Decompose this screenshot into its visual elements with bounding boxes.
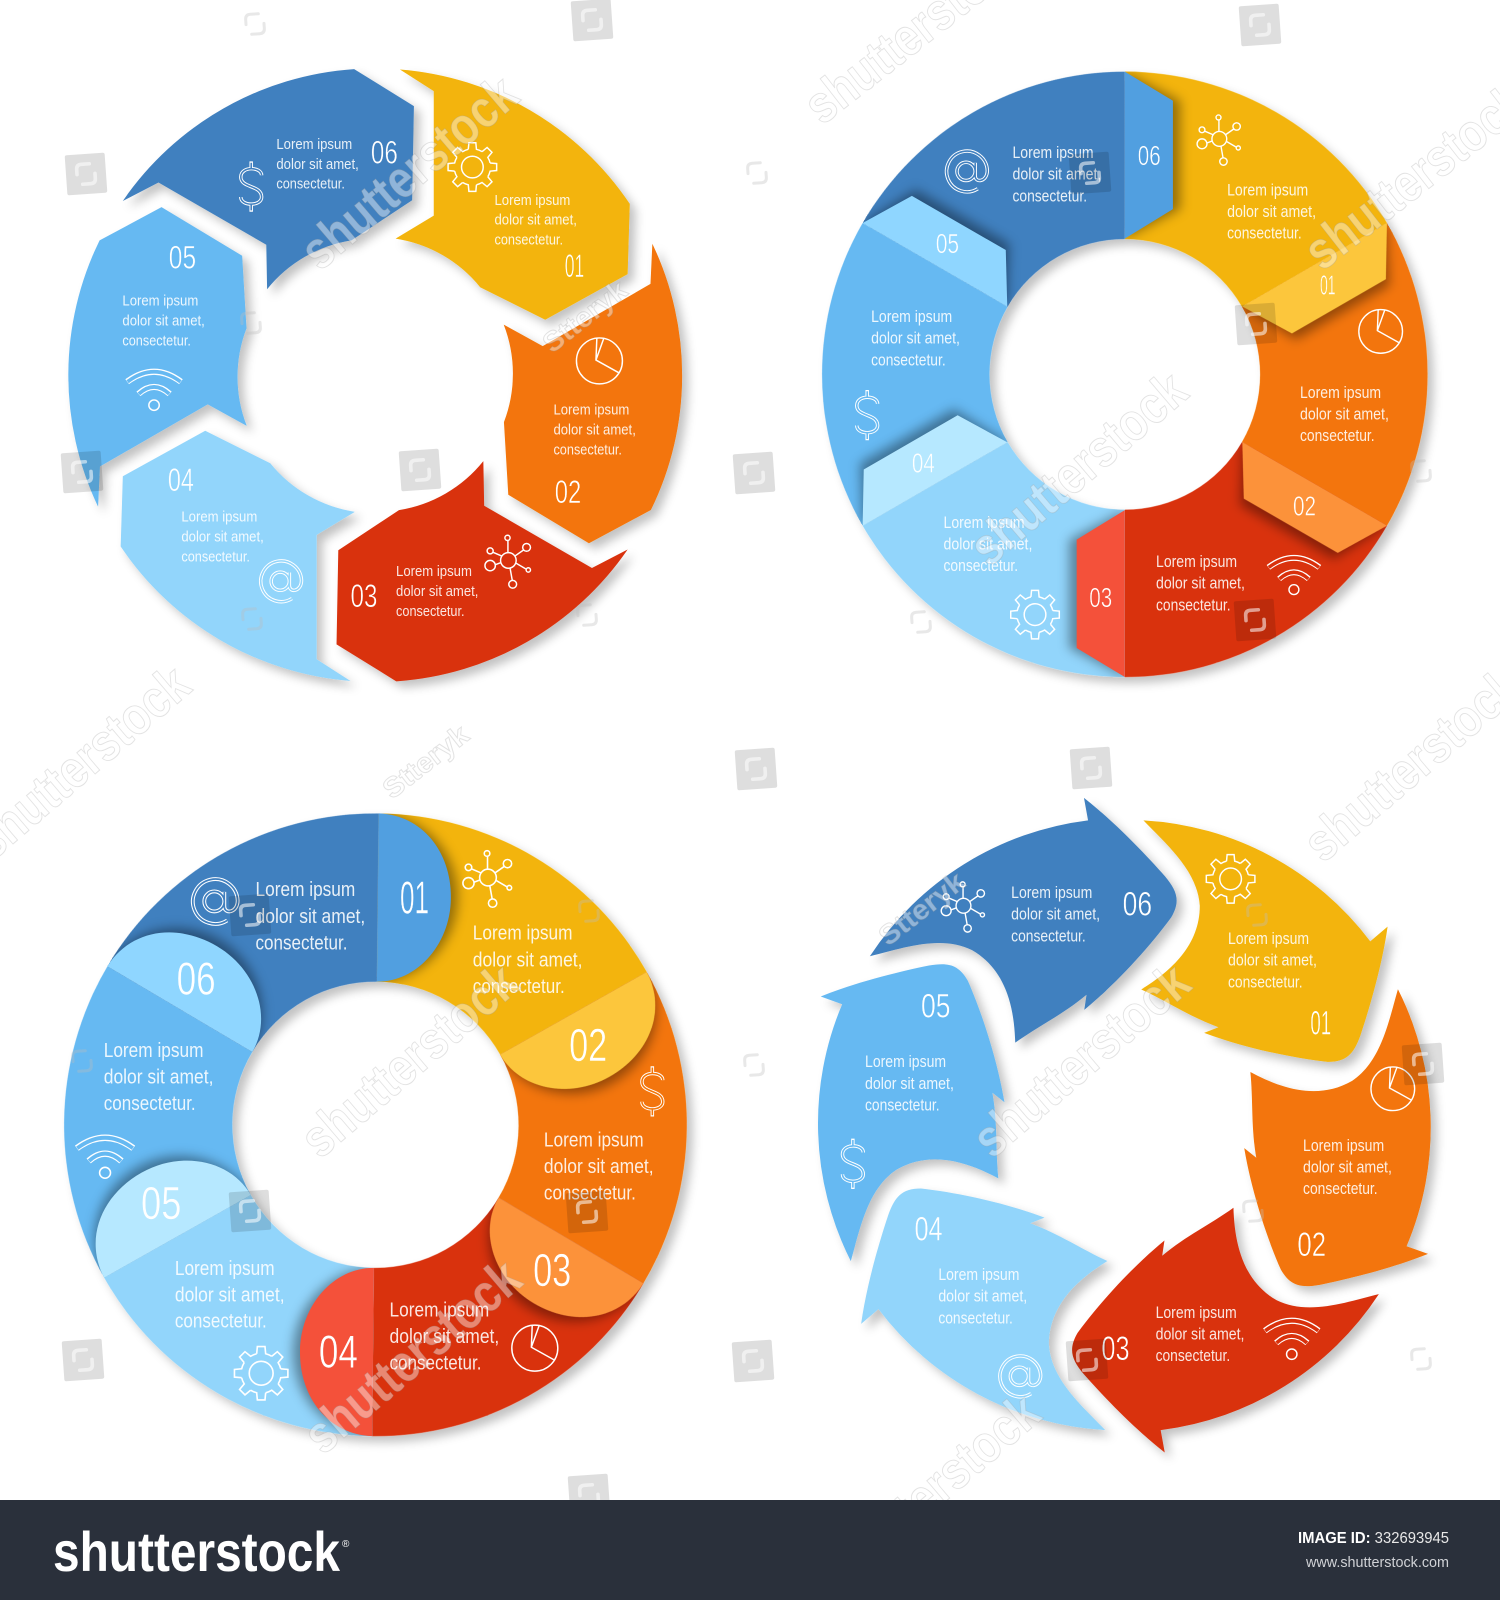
- segment 01 yellow: consectetur.: [494, 232, 563, 249]
- arrow 02 orange: consectetur.: [1303, 1180, 1378, 1198]
- tab 06: [1125, 72, 1180, 239]
- arrow 02 orange: dolor sit amet,: [1303, 1158, 1392, 1176]
- tab 03: 03: [533, 1244, 571, 1296]
- tab 01: 01: [400, 872, 429, 924]
- footer band: [0, 1500, 1500, 1600]
- stock watermarks: shutterstock: [961, 952, 1202, 1169]
- segment 03 red: [296, 421, 630, 749]
- ring 2 text and icon: yellow: dolor sit amet,: [1227, 203, 1316, 221]
- ring 3 text and icon: mid blue: Lorem ipsum: [104, 1040, 203, 1062]
- ring 3 text and icon: orange: consectetur.: [544, 1182, 636, 1204]
- segment 05 mid blue: [0, 183, 317, 510]
- tab 06: 06: [177, 953, 216, 1005]
- tab 01: [1242, 223, 1396, 345]
- ring 2 text and icon: dark blue: consectetur.: [1012, 187, 1087, 205]
- arrow 04 light blue: dolor sit amet,: [938, 1288, 1027, 1306]
- ring 2 text and icon: yellow: consectetur.: [1227, 225, 1302, 243]
- stock watermarks: shutterstock: [811, 1382, 1052, 1599]
- segment 02 orange: [433, 240, 767, 568]
- ring 3 text and icon: light blue: [175, 1258, 288, 1400]
- ring 2 text and icon: red: consectetur.: [1156, 596, 1231, 614]
- ring 2 text and icon: mid blue: dolor sit amet,: [871, 330, 960, 348]
- arrow 05 mid blue: Lorem ipsum: [865, 1053, 946, 1071]
- ring 2 text and icon: orange: consectetur.: [1300, 427, 1375, 445]
- arrow 05 mid blue: dolor sit amet,: [865, 1075, 954, 1093]
- ring 3 text and icon: red: consectetur.: [390, 1352, 481, 1374]
- ring 3 text and icon: orange: dolor sit amet,: [544, 1156, 654, 1178]
- image id: IMAGE ID: 332693945: [1298, 1530, 1449, 1547]
- ring 3 text and icon: yellow: Lorem ipsum: [473, 923, 573, 945]
- tab 05: 05: [936, 228, 959, 259]
- tab 05: [65, 1125, 251, 1278]
- ring 2: full ring with hexagonal folded tabs: [732, 0, 1500, 753]
- arrow 06 dark blue: dolor sit amet,: [1011, 906, 1100, 924]
- segment 02 orange: consectetur.: [553, 442, 622, 459]
- segment 03 red: 03: [351, 578, 377, 614]
- ring 3 text and icon: orange: [544, 1066, 663, 1204]
- segment 03 red: dolor sit amet,: [396, 583, 478, 600]
- tab 01: [377, 813, 459, 983]
- ring 2 text and icon: yellow: [1197, 115, 1316, 243]
- footer logo: shutterstock: [53, 1520, 341, 1583]
- arrow 03 red: dolor sit amet,: [1156, 1325, 1244, 1343]
- ring 3 text and icon: dark blue: [193, 879, 365, 955]
- tab 06: [107, 897, 293, 1052]
- ring 2 text and icon: red: dolor sit amet,: [1156, 575, 1245, 593]
- segment 05 mid blue: 05: [169, 240, 196, 276]
- segment 04 light blue: Lorem ipsum: [181, 508, 257, 525]
- arrow 04 light blue: [861, 1189, 1107, 1430]
- ring 2 text and icon: light blue: [944, 514, 1059, 639]
- stock watermarks: shutterstock: [289, 64, 530, 281]
- tab 06: 06: [1138, 140, 1161, 171]
- segment 06 dark blue: 06: [371, 135, 398, 171]
- ring 2 text and icon: light blue: dolor sit amet,: [944, 536, 1032, 554]
- arrow 02 orange: [1188, 987, 1500, 1322]
- ring 2 text and icon: dark blue: [947, 144, 1101, 205]
- stock watermarks: Stteryk: [873, 865, 971, 952]
- segment 05 mid blue: consectetur.: [122, 332, 191, 349]
- ring 2 text and icon: yellow: Lorem ipsum: [1227, 181, 1308, 199]
- tab 04: 04: [912, 447, 935, 478]
- ring 2 text and icon: dark blue: dolor sit amet,: [1012, 166, 1101, 184]
- segment 03 red: consectetur.: [396, 603, 465, 620]
- arrow 01 yellow: 01: [1310, 1005, 1331, 1043]
- tab 02: [500, 972, 664, 1101]
- ring 3 text and icon: orange: Lorem ipsum: [544, 1129, 644, 1151]
- ring 3 text and icon: yellow: [463, 851, 583, 998]
- ring 3 text and icon: yellow: dolor sit amet,: [473, 949, 583, 971]
- tab 05: 05: [141, 1177, 181, 1229]
- ring 3 text and icon: red: Lorem ipsum: [390, 1299, 489, 1321]
- tab 02: 02: [569, 1019, 607, 1071]
- stock watermarks: Stteryk: [377, 718, 475, 805]
- arrow 05 mid blue: 05: [921, 988, 950, 1026]
- ring 2 text and icon: light blue: consectetur.: [944, 557, 1018, 575]
- segment 04 light blue: 04: [168, 462, 194, 498]
- ring 3 text and icon: light blue: Lorem ipsum: [175, 1258, 275, 1280]
- segment 05 mid blue: dolor sit amet,: [122, 312, 205, 329]
- segment 03 red: Lorem ipsum: [396, 563, 472, 580]
- tab 03: [1069, 510, 1125, 677]
- segment 04 light blue: dolor sit amet,: [181, 528, 264, 545]
- segment 01 yellow: [396, 69, 630, 320]
- stock watermarks: shutterstock: [289, 952, 530, 1169]
- ring 2 text and icon: mid blue: consectetur.: [871, 351, 946, 369]
- tab 04: 04: [319, 1326, 358, 1378]
- ring 2 text and icon: dark blue: Lorem ipsum: [1012, 144, 1094, 162]
- ring 3 text and icon: light blue: dolor sit amet,: [175, 1284, 285, 1306]
- website url: www.shutterstock.com: [1305, 1554, 1449, 1571]
- ring 3 text and icon: light blue: consectetur.: [175, 1311, 267, 1333]
- ring 2 text and icon: light blue: Lorem ipsum: [944, 514, 1025, 532]
- ring 2 text and icon: mid blue: [857, 308, 960, 440]
- ring 2 sectors: [732, 0, 1500, 753]
- ring 3 text and icon: dark blue: dolor sit amet,: [256, 906, 365, 928]
- registered mark: ®: [342, 1539, 350, 1550]
- arrow 04 light blue: Lorem ipsum: [938, 1266, 1019, 1284]
- arrow 04 light blue: 04: [914, 1211, 943, 1249]
- arrow 06 dark blue: [869, 745, 1201, 1079]
- ring 3 text and icon: mid blue: dolor sit amet,: [104, 1067, 213, 1089]
- ring 3 text and icon: mid blue: consectetur.: [104, 1093, 196, 1115]
- ring 3: full ring with rounded tabs: [64, 813, 698, 1448]
- segment 01 yellow: dolor sit amet,: [494, 212, 577, 229]
- segment 02 orange: dolor sit amet,: [553, 422, 636, 439]
- arrow 06 dark blue: Lorem ipsum: [1011, 884, 1092, 902]
- arrow 01 yellow: consectetur.: [1228, 973, 1303, 991]
- ring 3 text and icon: dark blue: consectetur.: [256, 933, 347, 955]
- arrow 05 mid blue: [729, 929, 1061, 1263]
- ring 3 text and icon: yellow: consectetur.: [473, 976, 565, 998]
- tab 04: [835, 394, 1007, 526]
- ring 2 text and icon: red: [1156, 553, 1319, 614]
- segment 06 dark blue: Lorem ipsum: [276, 136, 352, 153]
- arrow 03 red: 03: [1101, 1330, 1130, 1368]
- segment 05 mid blue: Lorem ipsum: [122, 292, 198, 309]
- segment 02 orange: 02: [555, 474, 581, 510]
- stock watermarks: Stteryk: [537, 274, 633, 359]
- ring 3 text and icon: red: dolor sit amet,: [390, 1326, 499, 1348]
- arrow 01 yellow: Lorem ipsum: [1228, 930, 1309, 948]
- arrow 05 mid blue: consectetur.: [865, 1096, 940, 1114]
- arrow 02 orange: 02: [1297, 1226, 1326, 1264]
- tab 02: [1234, 442, 1387, 564]
- ring 3 text and icon: red: [390, 1299, 558, 1374]
- arrow 02 orange: Lorem ipsum: [1303, 1137, 1384, 1155]
- tab 04: [292, 1267, 374, 1436]
- stock watermarks: shutterstock: [292, 1248, 533, 1465]
- ring 2 text and icon: orange: dolor sit amet,: [1300, 405, 1389, 423]
- segment 06 dark blue: dolor sit amet,: [276, 156, 359, 173]
- arrow 06 dark blue: consectetur.: [1011, 927, 1086, 945]
- ring 2 text and icon: orange: [1300, 310, 1402, 445]
- arrow 06 dark blue: 06: [1123, 885, 1152, 923]
- ring 1: six hexagon-tab segments: [0, 2, 767, 749]
- tab 03: 03: [1089, 582, 1112, 613]
- ring 2 text and icon: orange: Lorem ipsum: [1300, 384, 1381, 402]
- ring 2 text and icon: mid blue: Lorem ipsum: [871, 308, 952, 326]
- segment 04 light blue: consectetur.: [181, 548, 250, 565]
- tab 01: 01: [1320, 270, 1336, 301]
- ring 4: six curved arrows: [729, 745, 1500, 1506]
- stock watermarks: shutterstock: [958, 360, 1199, 577]
- segment 06 dark blue: [121, 2, 454, 330]
- segment 01 yellow: Lorem ipsum: [494, 192, 570, 209]
- segment 04 light blue: [121, 431, 355, 681]
- arrow 03 red: Lorem ipsum: [1156, 1304, 1237, 1322]
- segment 06 dark blue: consectetur.: [276, 176, 345, 193]
- arrow 03 red: consectetur.: [1156, 1347, 1230, 1365]
- arrow 01 yellow: [1141, 820, 1388, 1062]
- ring 3 text and icon: mid blue: [77, 1040, 213, 1178]
- tab 02: 02: [1293, 491, 1316, 522]
- arrow 01 yellow: dolor sit amet,: [1228, 952, 1317, 970]
- ring 2 text and icon: red: Lorem ipsum: [1156, 553, 1237, 571]
- arrow 03 red: [1048, 1172, 1380, 1506]
- tab 05: [863, 175, 1035, 306]
- ring 3 sectors: [0, 734, 779, 1515]
- arrow 04 light blue: consectetur.: [938, 1309, 1013, 1327]
- segment 01 yellow: 01: [565, 248, 584, 284]
- ring 3 text and icon: dark blue: Lorem ipsum: [256, 879, 355, 901]
- tab 03: [482, 1198, 644, 1328]
- segment 02 orange: Lorem ipsum: [553, 402, 629, 419]
